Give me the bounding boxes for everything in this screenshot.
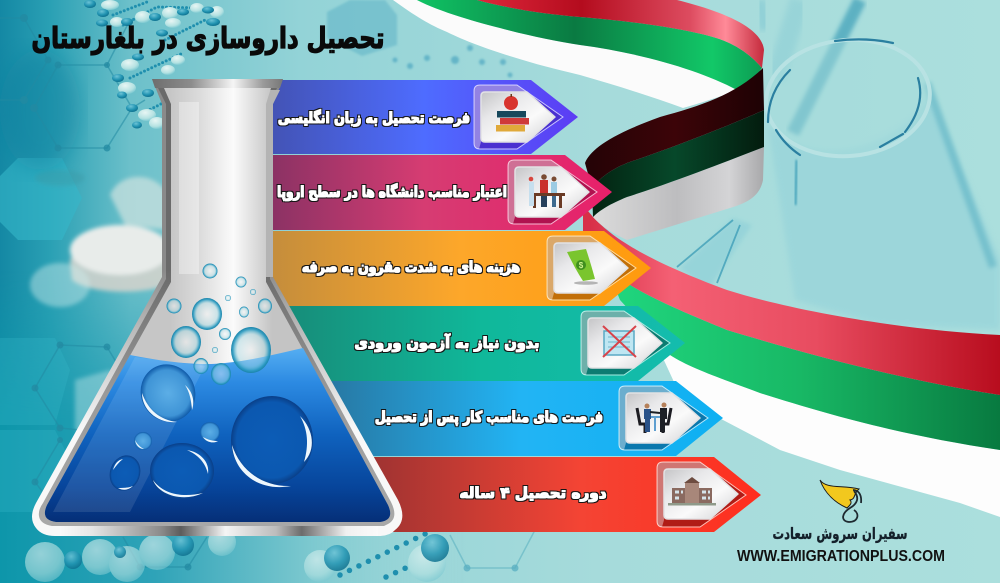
bubbles above the liquid bbox=[166, 264, 272, 385]
molecule strand bbox=[84, 0, 224, 129]
upper green band bbox=[417, 0, 762, 90]
banner 6 label: دوره تحصیل ۴ ساله bbox=[460, 484, 607, 502]
upper red band bbox=[477, 0, 764, 68]
banner 2: European university accreditation bbox=[270, 155, 612, 230]
frame highlight bbox=[657, 462, 710, 527]
icon plate frame bbox=[657, 462, 746, 527]
flask right neck wall bbox=[263, 90, 280, 277]
upper white band bbox=[393, 0, 737, 108]
frame highlight bbox=[581, 311, 634, 375]
flask rim bbox=[152, 79, 283, 88]
frame highlight bbox=[474, 85, 527, 149]
icon plate frame bbox=[581, 311, 670, 375]
pills bbox=[30, 170, 170, 440]
test tubes bbox=[677, 0, 1000, 330]
icon plate bbox=[588, 318, 662, 368]
flask base chrome bbox=[60, 525, 378, 536]
bubbles inside the liquid bbox=[105, 355, 313, 499]
logo wordmark: سفیران سروش سعادت bbox=[772, 524, 908, 543]
banner 4 label: بدون نیاز به آزمون ورودی bbox=[354, 334, 540, 352]
hexagon network bbox=[0, 14, 535, 572]
flag ribbon: upper fold bbox=[393, 0, 764, 240]
banner 5: job opportunities bbox=[320, 381, 723, 456]
icon plate bbox=[481, 92, 555, 142]
icon: apple on dictionaries bbox=[496, 94, 529, 132]
bottom molecules bbox=[25, 528, 449, 582]
icon plate bbox=[515, 167, 589, 217]
icon: banknote: $ bbox=[579, 261, 584, 270]
icon plate frame bbox=[547, 236, 636, 300]
top hexagon bbox=[327, 0, 397, 56]
icon plate bbox=[664, 469, 738, 519]
flask inner wall bbox=[39, 88, 394, 526]
icon plate bbox=[626, 393, 700, 443]
flask glass interior bbox=[45, 88, 390, 522]
liquid facet bbox=[53, 357, 205, 512]
soft dark shade at left bbox=[0, 50, 80, 170]
bubble glints bbox=[113, 385, 312, 497]
icon: people at table bbox=[529, 174, 565, 208]
bottom bead chain bbox=[340, 533, 427, 577]
website address: WWW.EMIGRATIONPLUS.COM bbox=[737, 548, 945, 565]
ribbon white band bbox=[650, 330, 1000, 517]
icon plate bbox=[554, 243, 628, 293]
icon plate frame bbox=[619, 386, 708, 450]
flag ribbon: lower sweep bbox=[583, 205, 1000, 517]
ribbon red band bbox=[583, 205, 1000, 395]
fold dark green band bbox=[592, 110, 764, 217]
fold gray band bbox=[593, 147, 764, 240]
flask neck highlight bbox=[179, 102, 199, 274]
banner 4: no entrance exam bbox=[280, 306, 685, 381]
fold dark red band bbox=[585, 68, 764, 188]
banner 5 label: فرصت های مناسب کار پس از تحصیل bbox=[375, 408, 603, 427]
icon: two people shaking hands bbox=[637, 402, 671, 433]
frame highlight bbox=[508, 160, 561, 224]
icon: university building bbox=[668, 477, 716, 506]
blurred molecule top centre bbox=[392, 45, 512, 78]
banner 3 label: هزینه های به شدت مقرون به صرفه bbox=[302, 258, 520, 276]
icon plate frame bbox=[474, 85, 563, 149]
logo wing icon bbox=[820, 480, 861, 522]
icon plate frame bbox=[508, 160, 597, 224]
banner 3: affordable costs bbox=[270, 231, 651, 306]
flask outer wall bbox=[32, 79, 402, 536]
banner 1: English-language study bbox=[270, 80, 578, 154]
title: تحصیل داروسازی در بلغارستان bbox=[32, 21, 384, 55]
banner 2 label: اعتبار مناسب دانشگاه ها در سطح اروپا bbox=[277, 183, 507, 202]
frame highlight bbox=[619, 386, 672, 450]
filled hexagons bbox=[0, 158, 82, 512]
logo bbox=[737, 480, 945, 565]
icon: banknote bbox=[567, 249, 598, 285]
banner 6: four-year course bbox=[360, 457, 761, 532]
ribbon green band bbox=[600, 250, 1000, 450]
liquid bbox=[45, 348, 390, 522]
background bbox=[0, 0, 520, 583]
frame highlight bbox=[547, 236, 600, 300]
flask bbox=[32, 79, 402, 536]
icon: crossed-out exam sheet bbox=[603, 326, 636, 357]
banner 1 label: فرصت تحصیل به زبان انگلیسی bbox=[278, 109, 470, 127]
